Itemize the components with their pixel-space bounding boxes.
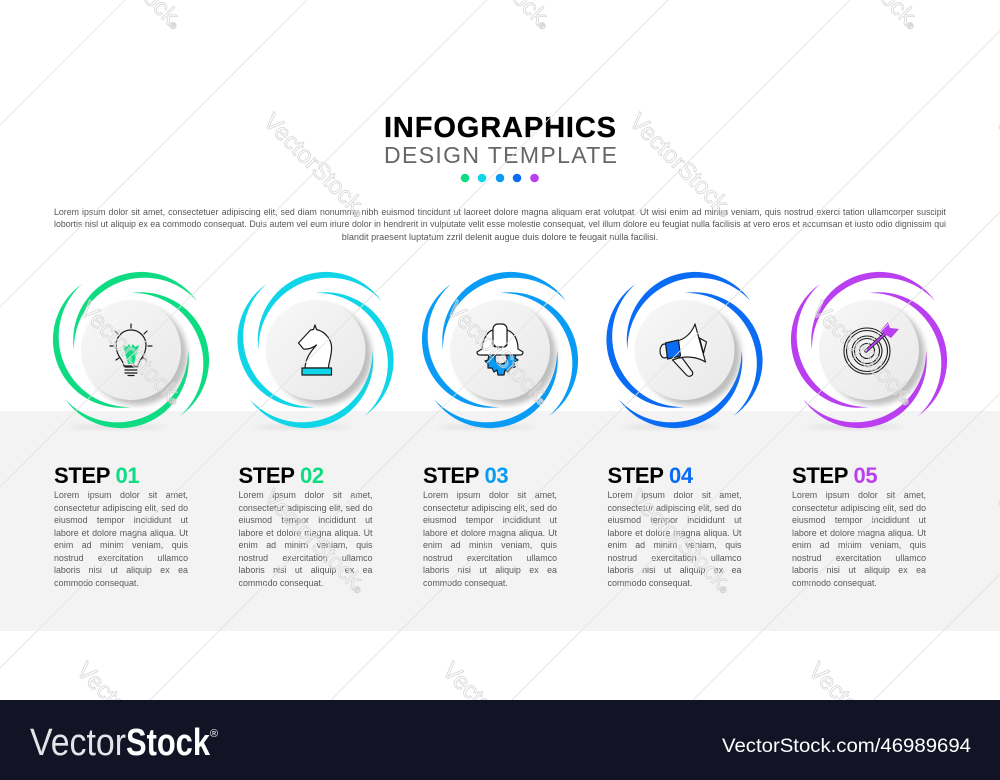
- step 1 text: enim ad minim veniam, quis: [54, 540, 188, 550]
- step 5 text: STEP 05: [792, 463, 877, 488]
- step 4 text: laboris nisi ut aliquip ex ea: [608, 565, 742, 575]
- watermark overlay: VectorStock®: [441, 296, 555, 411]
- step 5 text: consectetur adipiscing elit, sed do: [792, 503, 926, 513]
- step 5 text: laboris nisi ut aliquip ex ea: [792, 565, 926, 575]
- step 4 text: consectetur adipiscing elit, sed do: [608, 503, 742, 513]
- step 1 text: labore et dolore magna aliqua. Ut: [54, 528, 188, 538]
- step 5 text: [792, 463, 926, 588]
- icon: chess knight: [298, 325, 332, 375]
- intro paragraph: Lorem ipsum dolor sit amet, consectetuer adipiscing elit, sed diam nonummy nibh euismod tincidunt ut laoreet dolore magna aliquam erat volutpat. Ut wisi enim ad minim veniam, quis nostrud exerci tation ullamcorper suscipit: [54, 207, 946, 217]
- badge: step 3 helmet and gear: [422, 272, 578, 428]
- step 3 text: eiusmod tempor incididunt ut: [423, 515, 557, 525]
- step 4 text: Lorem ipsum dolor sit amet,: [608, 490, 742, 500]
- badge: step 1 lightbulb: [53, 272, 209, 428]
- step 2 text: commodo consequat.: [238, 578, 323, 588]
- icon: helmet and gear: [477, 324, 523, 375]
- watermark overlay: VectorStock®: [258, 108, 372, 223]
- step 2 text: consectetur adipiscing elit, sed do: [238, 503, 372, 513]
- step 4 text: STEP 04: [608, 463, 693, 488]
- step 2 text: [238, 463, 372, 588]
- step 5 text: Lorem ipsum dolor sit amet,: [792, 490, 926, 500]
- step 4 text: enim ad minim veniam, quis: [608, 540, 742, 550]
- grey band: [0, 411, 1000, 631]
- step 2 text: eiusmod tempor incididunt ut: [238, 515, 372, 525]
- step 2 text: laboris nisi ut aliquip ex ea: [238, 565, 372, 575]
- step 3 text: consectetur adipiscing elit, sed do: [423, 503, 557, 513]
- intro paragraph: [54, 207, 946, 242]
- step 3 text: STEP 03: [423, 463, 508, 488]
- step 4 text: commodo consequat.: [608, 578, 692, 588]
- watermark overlay: VectorStock®: [806, 296, 920, 411]
- step 2 text: labore et dolore magna aliqua. Ut: [238, 528, 372, 538]
- step 1 text: nostrud exercitation ullamco: [54, 553, 188, 563]
- watermark overlay: VectorStock®: [258, 484, 372, 599]
- intro paragraph: lobortis nisl ut aliquip ex ea commodo consequat. Duis autem vel eum iriure dolor in hendrerit in vulputate velit esse molestie consequat, vel illum dolore eu feugiat nulla facilisis at vero eros et accumsan et iusto odio dignissim qui: [54, 219, 946, 229]
- subtitle: DESIGN TEMPLATE: [384, 142, 617, 168]
- step 4 text: labore et dolore magna aliqua. Ut: [608, 528, 742, 538]
- step 1 text: eiusmod tempor incididunt ut: [54, 515, 188, 525]
- step 1 text: commodo consequat.: [54, 578, 139, 588]
- step 3 text: laboris nisi ut aliquip ex ea: [423, 565, 557, 575]
- step 5 text: enim ad minim veniam, quis: [792, 540, 926, 550]
- step 3 text: Lorem ipsum dolor sit amet,: [423, 490, 557, 500]
- step 2 text: enim ad minim veniam, quis: [238, 540, 372, 550]
- step 5 text: commodo consequat.: [792, 578, 877, 588]
- badge: step 2 chess knight: [237, 272, 394, 428]
- icon: lightbulb: [110, 324, 152, 376]
- step 1 text: consectetur adipiscing elit, sed do: [54, 503, 188, 513]
- step 1 text: STEP 01: [54, 463, 139, 488]
- step 2 text: nostrud exercitation ullamco: [238, 553, 372, 563]
- step 4 text: [608, 463, 742, 588]
- step 3 text: enim ad minim veniam, quis: [423, 540, 557, 550]
- step 5 text: nostrud exercitation ullamco: [792, 553, 926, 563]
- step 1 text: Lorem ipsum dolor sit amet,: [54, 490, 188, 500]
- watermark overlay: VectorStock®: [437, 657, 551, 772]
- step 4 text: eiusmod tempor incididunt ut: [608, 515, 742, 525]
- watermark overlay: VectorStock®: [71, 657, 185, 772]
- step 3 text: commodo consequat.: [423, 578, 508, 588]
- watermark overlay: VectorStock®: [624, 108, 738, 223]
- step 5 text: eiusmod tempor incididunt ut: [792, 515, 926, 525]
- step 2 text: STEP 02: [238, 463, 324, 488]
- step 3 text: [423, 463, 557, 588]
- step 2 text: Lorem ipsum dolor sit amet,: [238, 490, 372, 500]
- badge: step 5 target: [791, 272, 947, 428]
- footer logo: [30, 722, 218, 764]
- step 5 text: labore et dolore magna aliqua. Ut: [792, 528, 926, 538]
- step 4 text: nostrud exercitation ullamco: [608, 553, 742, 563]
- step 3 text: labore et dolore magna aliqua. Ut: [423, 528, 557, 538]
- footer logo: ®: [210, 728, 218, 740]
- icon: megaphone: [660, 324, 706, 376]
- footer logo: Vector: [30, 722, 126, 764]
- footer image id: VectorStock.com/46989694: [722, 736, 971, 757]
- step 1 text: [54, 463, 188, 588]
- intro paragraph: blandit praesent luptatum zzril delenit augue duis dolore te feugait nulla facilisi.: [342, 232, 658, 242]
- watermark overlay: VectorStock®: [803, 657, 917, 772]
- title: INFOGRAPHICS: [384, 112, 616, 144]
- watermark overlay: VectorStock®: [624, 484, 738, 599]
- colour dots: [461, 174, 539, 182]
- step 1 text: laboris nisi ut aliquip ex ea: [54, 565, 188, 575]
- step 3 text: nostrud exercitation ullamco: [423, 553, 557, 563]
- icon: target and arrow: [844, 322, 899, 374]
- watermark overlay: VectorStock®: [74, 296, 188, 411]
- footer logo: Stock: [126, 722, 211, 764]
- badge: step 4 megaphone: [606, 272, 763, 428]
